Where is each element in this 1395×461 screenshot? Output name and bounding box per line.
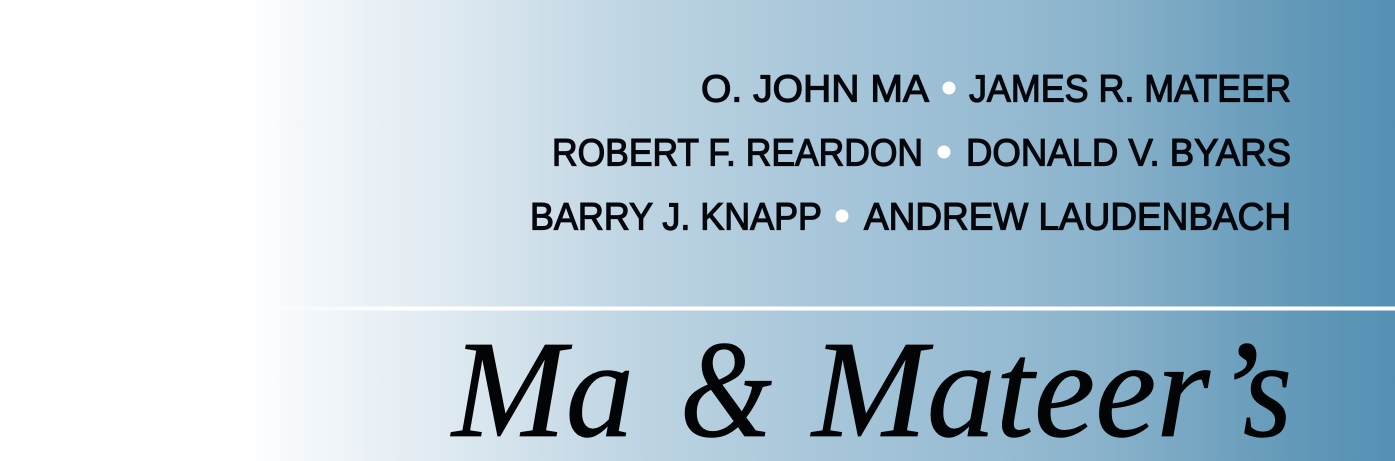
author line 2	[552, 132, 1291, 174]
author line 3: ANDREW LAUDENBACH	[864, 196, 1291, 238]
title	[450, 313, 1292, 461]
author line 1: O. JOHN MA	[701, 68, 930, 110]
authors block	[530, 68, 1291, 238]
author line 1: JAMES R. MATEER	[969, 68, 1291, 110]
author line 2: ROBERT F. REARDON	[552, 132, 923, 174]
author line 3	[530, 196, 1291, 238]
author line 3: BARRY J. KNAPP	[530, 196, 822, 238]
author line 1	[701, 68, 1291, 110]
author line 2: DONALD V. BYARS	[966, 132, 1291, 174]
horizontal white rule	[250, 306, 1395, 310]
